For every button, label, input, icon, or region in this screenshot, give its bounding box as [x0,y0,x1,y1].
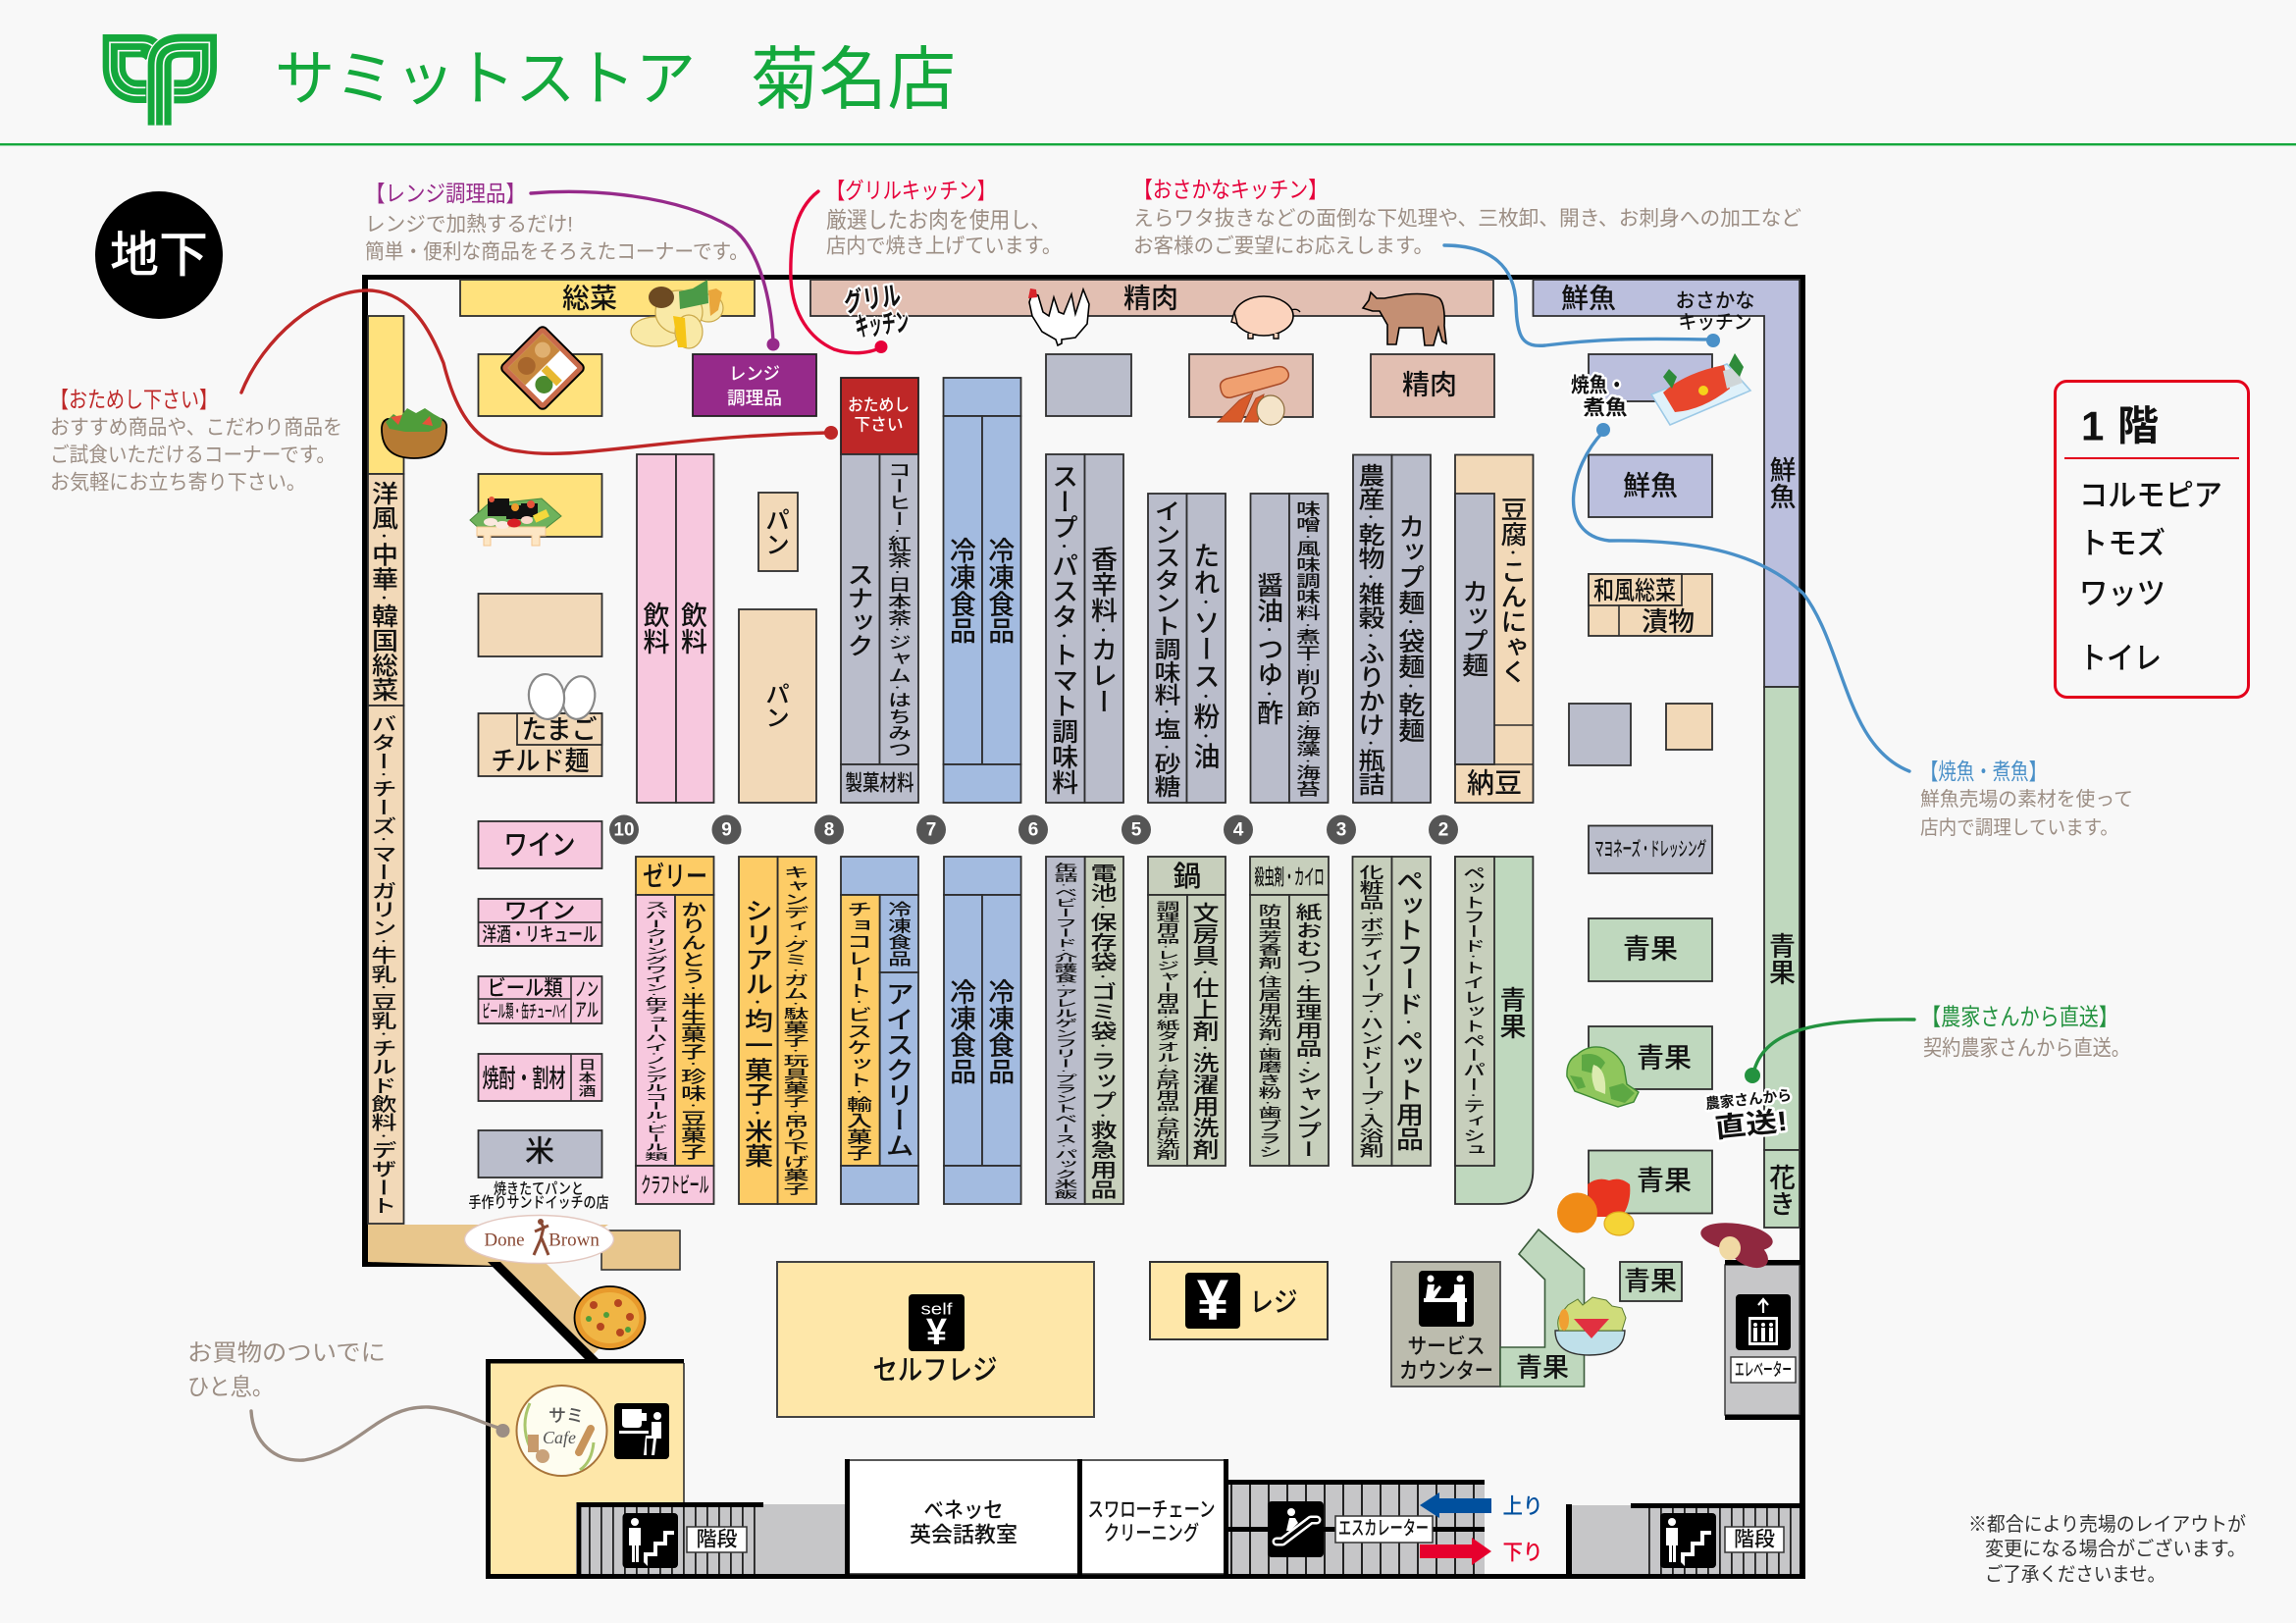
illustration: tempura [631,280,723,348]
shelf: パン small: パン [761,507,789,556]
south shelf: チョコレート・アイス: チョコレート・ビスケット・輸入菓子 [844,901,873,1161]
icon: stairs [622,1513,678,1568]
illustration: sweet potato [1698,1219,1775,1275]
logo: Summit leaf mark [110,42,209,126]
title: store name [275,41,956,118]
callout: 農家さんから直送: 【農家さんから直送】 [1921,1005,2118,1030]
caption: パン店: 焼きたてパンと [494,1179,584,1197]
curve: cafe [251,1407,510,1460]
counter: west perimeter [368,316,404,1224]
south shelf: 鍋: 鍋 [1173,861,1202,893]
south shelf: ペットフード・青果 [1455,857,1533,1204]
label: おさかなキッチン sign: おさかな [1676,290,1754,312]
south shelf: ゼリー・かりんとう: スパークリングワイン・缶チューハイ・ノンアルコール・ビール類 [640,901,667,1161]
island: sashimi [1589,354,1712,401]
aisle 10: 飲料: 飲料 [640,602,669,654]
illustration: fruits [1557,1179,1634,1235]
south shelf: 鍋: 調理用品・レジャー用品・紙タオル・台所用品・台所洗剤 [1152,901,1179,1160]
building walls [362,275,1805,1579]
island: レンジ調理品: 調理品 [727,389,782,408]
south shelf: チョコレート・アイス: 冷凍食品 [884,901,912,967]
counter: 精肉 top: 精肉 [1123,283,1178,314]
illustration: fruit bowl [1555,1297,1626,1355]
callout: レンジ調理品: 簡単・便利な商品をそろえたコーナーです。 [365,241,749,263]
illustration: pig [1231,296,1300,339]
south shelf: 鍋 [1148,857,1226,1166]
south shelf: シリアル: キャンディ・グミ・ガム・駄菓子・玩具菓子・吊り下げ菓子 [780,865,809,1195]
label: グリルキッチン sign [842,280,911,342]
counter: レジ: レジ [1250,1287,1297,1317]
label: 階段 [687,1527,747,1552]
icon: サミCafe logo [516,1386,606,1476]
island: 青果 small: 青果 [1624,1267,1677,1296]
south shelf: 殺虫剤: 防虫芳香剤・住居用洗剤・歯磨き粉・歯ブラシ [1254,904,1281,1158]
island: 青果 2: 青果 [1637,1042,1692,1073]
aisle numbers: 8 [824,820,834,840]
callout: おさかなキッチン: 【おさかなキッチン】 [1133,177,1328,202]
south shelf: 化粧品・ペット: ペットフード・ ペット用品 [1393,868,1424,1151]
bakery corridor [368,1225,680,1359]
note: layout disclaimer: ご了承くださいませ。 [1985,1563,2166,1586]
south shelf: シリアル [739,857,816,1204]
shelf: パン large: パン [761,682,789,729]
callout: おさかなキッチン [1133,177,1801,257]
floor badge: 地下 [95,191,223,319]
counter: 花き: 花き [1765,1164,1796,1217]
heading: 1階: 1 階 [2081,402,2159,449]
counter: 鮮魚 perimeter [1533,280,1800,687]
callout: レンジ調理品: 【レンジ調理品】 [365,181,526,206]
counter: 総菜: 総菜 [562,283,617,314]
callout: 焼魚・煮魚: 店内で調理しています。 [1920,816,2118,839]
aisle 6: スープ: スープ・ パスタ・ トマト調味料 [1048,463,1078,795]
south shelf: 殺虫剤 [1250,857,1329,1166]
label: 農家さんから直送! [1704,1087,1796,1144]
south shelf: 缶詰・電池: 缶詰・ベビーフード・介護食・アレルゲンフリー・プラントベース・パック米飯 [1050,863,1077,1199]
escalator [1228,1480,1542,1574]
island: ワイン: ワイン [504,830,575,862]
illustration: sashimi [1651,353,1750,425]
counter: レジ [1150,1262,1328,1339]
label: 焼魚・煮魚 sign: 焼魚・ [1571,375,1626,396]
label: エレベーター: エレベーター [1735,1360,1792,1380]
island: マヨネーズ [1589,826,1712,873]
counter: サービスカウンター: カウンター [1399,1358,1493,1384]
directory list [2079,479,2222,675]
title: store name: 菊名店 [751,41,956,118]
island: lunch box [479,354,602,416]
aisle numbers: 4 [1233,820,1244,840]
label: 焼魚・煮魚 sign: 煮魚 [1584,396,1627,420]
south shelf: 缶詰・電池: 電池・保存袋・ゴミ袋・ラップ・救急用品 [1087,863,1117,1199]
island: ワイン・洋酒: 洋酒・リキュール [483,923,597,946]
south shelf: シリアル: シリアル・ 均一菓子・ 米菓 [740,898,773,1168]
aisle 8: スナック [841,454,918,803]
callout: おためし下さい: お気軽にお立ち寄り下さい。 [50,471,306,495]
south shelf: ゼリー・かりんとう: かりんとう・半生菓子・珍味・豆菓子 [677,901,706,1160]
island: 米: 米 [525,1136,554,1168]
aisle 6: スープ: 香辛料 ・ カレー [1087,546,1117,714]
aisle 8: スナック: スナック [844,562,873,657]
aisle 2: 豆腐: 豆腐・ こんにゃく [1497,497,1527,684]
counter: セルフレジ: セルフレジ [873,1355,997,1387]
caption: パン店 [469,1179,608,1211]
arrow: 上り [1420,1492,1542,1519]
callout: 焼魚・煮魚 [1920,759,2133,839]
label: 農家さんから直送!: 農家さんから [1704,1087,1793,1113]
island: 精肉: 精肉 [1402,369,1457,400]
label: エスカレーター [1335,1516,1433,1543]
curve: 焼魚・煮魚 [1574,423,1909,771]
label: おさかなキッチン sign [1676,290,1754,334]
callout: cafe note: ひと息。 [187,1374,274,1401]
south shelf: 冷凍食品: 冷凍食品 [984,978,1015,1084]
title: store name: サミットストア [275,45,696,114]
island: マヨネーズ: マヨネーズ・ドレッシング [1594,838,1706,861]
island: ワイン・洋酒 [479,898,602,946]
callout: おさかなキッチン: お客様のご要望にお応えします。 [1133,236,1434,257]
label: グリルキッチン sign: グリル [842,280,903,318]
icon: self yen [909,1294,965,1353]
island: 青果 3: 青果 [1637,1166,1692,1195]
stairs: left [577,1502,845,1579]
label: バター・チーズ・マーガリン・牛乳・豆乳・チルド飲料・デザート [368,714,397,1215]
note: layout disclaimer [1968,1513,2246,1586]
south shelf: 殺虫剤: 紙おむつ・生理用品・シャンプー [1291,903,1322,1158]
shelf: おためし下さい [841,378,918,454]
south shelf: 鍋: 文房具・仕上剤・洗濯用洗剤 [1189,902,1219,1160]
aisle 3: 農産: カップ麺・ 袋麺 ・ 乾麺 [1394,513,1425,743]
icon: elevator [1736,1294,1791,1350]
counter: サービスカウンター: サービス [1407,1335,1486,1358]
note: layout disclaimer: ※都合により売場のレイアウトが [1968,1513,2246,1536]
counter: 花き [1764,1150,1800,1228]
cafe room [486,1359,684,1579]
directory list: トイレ [2079,642,2162,675]
island: たまご・チルド麺: たまご [522,715,597,745]
directory list: トモズ [2079,526,2166,561]
callout: グリルキッチン: 店内で焼き上げています。 [826,236,1062,257]
counter: セルフレジ [777,1262,1094,1417]
south shelf: 化粧品・ペット [1352,857,1431,1166]
island: ビール類: アル [575,1001,599,1021]
island: ビール類 [479,975,602,1023]
arrow: 下り [1420,1538,1542,1565]
callout: グリルキッチン: 厳選したお肉を使用し、 [826,207,1051,233]
island: 米 [479,1130,602,1178]
curve: 農家さんから [1745,1020,1914,1083]
south shelf: ゼリー・かりんとう [636,857,714,1204]
tenant: ベネッセ [845,1459,1079,1575]
island: tan small [1666,704,1712,750]
callout: レンジ調理品: レンジで加熱するだけ! [365,214,573,236]
callout: グリルキッチン [826,178,1062,257]
elevator [1725,1260,1801,1420]
south shelf: 化粧品・ペット: 化粧品・ボディソープ・ハンドソープ・入浴剤 [1356,864,1383,1158]
illustration: pizza [575,1286,646,1349]
island: 和風総菜・漬物: 和風総菜 [1593,576,1676,605]
icon: yen: ¥ [1197,1268,1228,1333]
callout: おためし下さい: ご試食いただけるコーナーです。 [50,444,336,467]
aisle 5: インスタント: インスタント調味料・ 塩・ 砂糖 [1150,499,1180,798]
panel: 1階 directory [2055,381,2249,697]
icon: cafe seat [614,1403,669,1459]
island: 青果 1: 青果 [1623,934,1678,964]
aisle 4: 醤油 [1250,494,1329,803]
counter: 精肉 top [810,280,1493,316]
aisle numbers [609,814,1458,844]
icon: service desk [1419,1271,1474,1327]
aisle 4: 醤油: 味噌・風味調味料・煮干・削り節・海藻・海苔 [1293,500,1321,797]
icon: サミCafe logo: サミ [548,1406,584,1426]
logo: Done Brown [465,1215,614,1264]
island: ビール類: ビール類・缶チューハイ [483,1002,567,1021]
island: レンジ調理品 [693,354,816,416]
island: 鮮魚 [1589,455,1712,517]
label: 階段: 階段 [1734,1529,1775,1550]
island: たまご・チルド麺 [479,713,602,776]
aisle numbers: 10 [614,820,634,840]
counter: 青果 perimeter: 青果 [1765,932,1796,985]
aisle 8: スナック: コーヒー・紅茶・日本茶・ジャム・はちみつ [883,461,911,758]
aisle 7: 冷凍食品 [944,378,1020,803]
counter: 鮮魚 perimeter: 鮮魚 [1561,283,1616,314]
aisle 7: 冷凍食品: 冷凍食品 [946,537,975,644]
callout: 農家さんから直送: 契約農家さんから直送。 [1923,1036,2130,1060]
label: 焼魚・煮魚 sign [1571,375,1627,420]
label: 階段: 階段 [697,1529,738,1550]
island: ビール類: ノン [575,979,599,1001]
illustration: eggs [526,672,599,722]
callout: グリルキッチン: 【グリルキッチン】 [826,178,996,203]
aisle numbers: 2 [1438,820,1448,840]
aisle 5: インスタント [1148,494,1226,803]
island: ビール類: ビール類 [487,975,563,1001]
callout: 焼魚・煮魚: 鮮魚売場の素材を使って [1920,788,2133,811]
callout: cafe note [187,1340,386,1401]
arrow: 上り: 上り [1503,1493,1542,1519]
label: 洋風・ 中華・ 韓国総菜 [368,481,398,702]
callout: cafe note: お買物のついでに [187,1340,386,1366]
aisle 2: 豆腐: カップ麺 [1458,579,1488,677]
shelf: パン small [758,493,798,571]
tenant: ベネッセ: ベネッセ [924,1497,1003,1523]
callout: おさかなキッチン: えらワタ抜きなどの面倒な下処理や、三枚卸、開き、お刺身への加工など [1133,208,1801,230]
island: ワイン [479,821,602,868]
aisle 10: 飲料: 飲料 [677,602,706,654]
aisle numbers: 7 [926,820,936,840]
island: 青果 1 [1589,918,1712,981]
icon: サミCafe logo: Cafe [543,1428,576,1447]
south shelf: ゼリー・かりんとう: ゼリー [643,862,707,891]
island: 焼酎・日本酒: 日本酒 [577,1058,597,1097]
aisle 6: スープ [1046,454,1123,803]
callout: 農家さんから直送 [1921,1005,2130,1060]
island: 和風総菜・漬物 [1589,574,1712,637]
callout: おためし下さい: 【おためし下さい】 [50,387,218,412]
logo: Done Brown: Brown [548,1230,600,1250]
island: レンジ調理品: レンジ [729,364,780,384]
illustration: chicken [1028,288,1089,345]
south shelf: チョコレート・アイス [841,857,918,1204]
stairs: right [1566,1503,1801,1575]
south shelf: 冷凍食品 [944,857,1021,1204]
aisle 2: 豆腐 [1455,455,1533,803]
island: 鮮魚: 鮮魚 [1623,471,1678,500]
icon: yen [1185,1268,1240,1333]
curve: おさかなキッチン [1444,245,1720,347]
island: gray end [1046,354,1131,416]
shelf: おためし下さい: 下さい [854,416,903,434]
illustration: sushi [470,497,561,546]
island: ワイン・洋酒: ワイン [504,898,575,923]
island: たまご・チルド麺: チルド麺 [491,747,589,776]
label: 階段 [1725,1527,1784,1552]
aisle numbers: 5 [1131,820,1142,840]
directory list: ワッツ [2079,577,2166,610]
note: layout disclaimer: 変更になる場合がございます。 [1985,1537,2246,1560]
icon: stairs [1660,1513,1716,1568]
shelf: おためし下さい: おためし [848,396,910,414]
shelf: パン large [739,609,816,803]
label: エレベーター [1731,1357,1796,1383]
header rule [0,143,2296,145]
tenant: ベネッセ: 英会話教室 [910,1523,1018,1546]
text: 殺虫剤・カイロ [1254,865,1325,889]
curve: おためし [241,290,838,453]
island: 焼酎・日本酒: 焼酎・割材 [483,1064,565,1093]
island: sausage [1189,354,1313,417]
callout: おためし下さい: おすすめ商品や、こだわり商品を [50,416,342,440]
south shelf: ペットフード・青果: 青果 [1495,986,1526,1039]
counter: 青果 L-shape: 青果 [1516,1353,1569,1383]
island: 和風総菜・漬物: 漬物 [1642,607,1695,637]
counter: サービスカウンター [1391,1262,1500,1387]
callout: 焼魚・煮魚: 【焼魚・煮魚】 [1920,759,2047,784]
label: グリルキッチン sign: キッチン [854,307,911,342]
island: gray small [1569,704,1631,765]
text: クラフトビール [642,1174,708,1197]
floor badge: 地下: 地下 [110,228,208,283]
island: 青果 small [1620,1262,1682,1301]
aisle 7: 冷凍食品: 冷凍食品 [984,537,1015,644]
callout: レンジ調理品 [365,181,749,263]
aisle 3: 農産 [1353,455,1431,803]
aisle 8: スナック: 製菓材料 [846,771,914,795]
icon: self yen: self [920,1299,953,1319]
south shelf: 冷凍食品: 冷凍食品 [946,978,976,1084]
aisle numbers: 6 [1028,820,1038,840]
label: おさかなキッチン sign: キッチン [1678,312,1752,334]
label: エスカレーター: エスカレーター [1338,1517,1429,1540]
curve: グリルキッチン [791,191,887,353]
directory list: コルモピア [2079,479,2222,512]
tenant: スワロー [1077,1459,1228,1575]
island: 青果 3 [1589,1150,1712,1213]
south shelf: ペットフード・青果: ペットフード・トイレットペーパー・ティシュ [1460,865,1486,1157]
aisle numbers: 3 [1336,820,1346,840]
illustration: salad bowl [382,408,446,458]
counter: 総菜 [460,280,755,316]
icon: escalator [1268,1501,1324,1557]
island: blank tan [479,594,602,656]
island: sushi [479,474,602,537]
south shelf: チョコレート・アイス: アイスクリーム [881,981,913,1158]
counter: 青果 L-shape [1500,1230,1584,1387]
illustration: lunch box [499,325,586,411]
callout: おためし下さい [50,387,342,495]
tenant: スワロー: スワローチェーン [1087,1499,1215,1521]
south shelf: 缶詰・電池 [1046,857,1123,1204]
aisle 3: 農産: 農産・ 乾物・ 雑穀・ ふりかけ・ 瓶詰 [1354,463,1384,796]
counter: 青果 perimeter [1764,687,1800,1150]
aisle numbers: 9 [721,820,732,840]
curve: レンジ調理品 [531,191,779,351]
icon: self yen: ¥ [926,1312,947,1353]
aisle 5: インスタント: たれ ・ ソース ・ 粉 ・ 油 [1189,542,1220,769]
label: 農家さんから直送!: 直送! [1713,1106,1789,1143]
island: 精肉 [1371,354,1494,417]
aisle 2: 豆腐: 納豆 [1467,767,1522,799]
island: 青果 2 [1589,1026,1712,1089]
caption: パン店: 手作りサンドイッチの店 [469,1193,608,1211]
logo: Done Brown: Done [484,1230,525,1250]
aisle 10: 飲料 [637,454,714,803]
illustration: lettuce [1567,1047,1639,1107]
aisle 4: 醤油: 醤油 ・ つゆ ・ 酢 [1253,572,1282,725]
illustration: sausages [1218,367,1288,425]
tenant: スワロー: クリーニング [1104,1523,1199,1544]
illustration: cow [1363,292,1446,345]
counter: 鮮魚 perimeter: 鮮魚 [1766,456,1796,509]
island: 焼酎・日本酒 [479,1054,602,1101]
arrow: 下り: 下り [1503,1541,1542,1564]
